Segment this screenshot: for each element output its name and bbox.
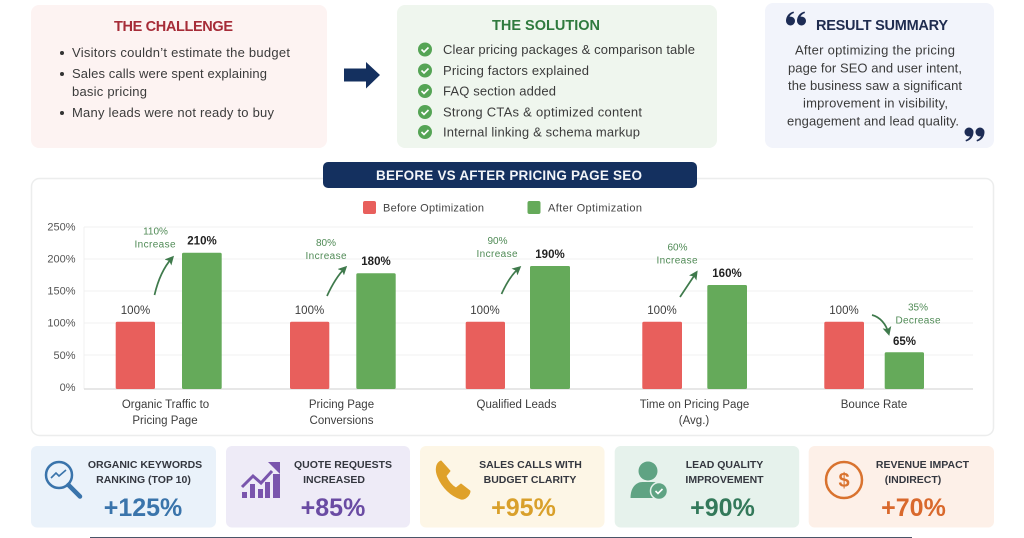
- card: organic keywords: [31, 446, 216, 528]
- group: pricing page conversions: [290, 238, 396, 427]
- panel: the challenge: [31, 5, 327, 148]
- y axis labels: [47, 222, 76, 394]
- group: time on pricing page: 100%: [647, 305, 677, 317]
- group: qualified leads: [466, 236, 570, 411]
- challenge bullet list: basic pricing: [72, 84, 147, 99]
- group: organic traffic: Pricing Page: [132, 415, 198, 427]
- icon: dollar coin: $: [838, 470, 850, 492]
- card: lead quality: [615, 446, 799, 528]
- panel: the solution: [397, 5, 717, 148]
- card: lead quality: LEAD QUALITY: [686, 459, 763, 471]
- group: qualified leads: 190%: [535, 249, 565, 261]
- card: lead quality: IMPROVEMENT: [685, 474, 764, 486]
- group: qualified leads: 90%: [487, 236, 508, 247]
- chart heading banner: BEFORE VS AFTER PRICING PAGE SEO: [376, 168, 642, 183]
- card: organic keywords: +125%: [104, 494, 182, 522]
- card: sales calls: SALES CALLS WITH: [479, 459, 582, 471]
- group: time on pricing page: [640, 242, 749, 427]
- bar chart: [47, 222, 973, 427]
- result summary text: improvement in visibility,: [803, 96, 948, 110]
- y axis labels: 250%: [47, 222, 76, 234]
- card: quote requests: QUOTE REQUESTS: [294, 459, 392, 471]
- solution check list: [418, 42, 695, 140]
- group: bounce rate: Bounce Rate: [841, 399, 907, 411]
- challenge bullet list: Sales calls were spent explaining: [72, 66, 267, 81]
- chart heading banner: [323, 162, 697, 188]
- arrow: challenge to solution: [344, 62, 380, 88]
- challenge bullet list: Visitors couldn’t estimate the budget: [72, 45, 290, 60]
- group: qualified leads: Qualified Leads: [477, 399, 557, 411]
- group: bounce rate: Decrease: [896, 316, 941, 326]
- result summary text: After optimizing the pricing: [795, 42, 955, 58]
- challenge bullet list: [60, 45, 290, 120]
- icon: verified person: [630, 462, 668, 500]
- card: quote requests: +85%: [301, 494, 365, 522]
- result summary text: the business saw a significant: [788, 78, 962, 93]
- group: organic traffic: Organic Traffic to: [122, 399, 209, 411]
- group: time on pricing page: 60%: [667, 242, 688, 254]
- icon: rising bar chart: [242, 462, 280, 498]
- group: organic traffic: Increase: [134, 240, 176, 250]
- result summary text: [787, 42, 962, 128]
- card: lead quality: +90%: [690, 494, 755, 522]
- y axis labels: 100%: [47, 318, 76, 330]
- group: pricing page conversions: Conversions: [310, 415, 374, 427]
- solution check list: FAQ section added: [443, 84, 556, 98]
- group: organic traffic: 210%: [187, 236, 217, 248]
- icon: phone: [436, 461, 470, 499]
- card: organic keywords: RANKING (TOP 10): [96, 474, 191, 486]
- group: pricing page conversions: 180%: [361, 256, 391, 268]
- card: organic keywords: ORGANIC KEYWORDS: [88, 459, 202, 471]
- group: pricing page conversions: 100%: [295, 305, 324, 317]
- group: qualified leads: 100%: [470, 305, 500, 317]
- group: bounce rate: [824, 302, 941, 411]
- solution check list: Strong CTAs & optimized content: [443, 104, 642, 120]
- y axis labels: 200%: [47, 254, 76, 266]
- heading: result summary: RESULT SUMMARY: [816, 18, 948, 34]
- group: qualified leads: Increase: [476, 249, 518, 260]
- group: time on pricing page: 160%: [712, 268, 742, 280]
- chart legend: Before Optimization: [383, 202, 484, 214]
- challenge bullet list: Many leads were not ready to buy: [72, 105, 274, 120]
- group: organic traffic: 100%: [121, 305, 150, 317]
- group: pricing page conversions: Pricing Page: [309, 399, 374, 411]
- group: pricing page conversions: Increase: [306, 251, 347, 262]
- solution check list: Pricing factors explained: [443, 63, 589, 78]
- y axis labels: 0%: [60, 382, 76, 394]
- icon: opening quote: [786, 12, 806, 26]
- group: time on pricing page: Increase: [656, 256, 698, 266]
- solution check list: Internal linking & schema markup: [443, 124, 640, 140]
- group: pricing page conversions: 80%: [316, 238, 336, 249]
- card: revenue impact: +70%: [881, 494, 946, 522]
- group: bounce rate: 100%: [829, 305, 859, 317]
- card: sales calls: +95%: [491, 494, 556, 522]
- card: quote requests: [226, 446, 410, 528]
- heading: the challenge: THE CHALLENGE: [114, 19, 233, 35]
- chart legend: After Optimization: [548, 202, 642, 214]
- y axis labels: 50%: [53, 350, 76, 362]
- bottom banner edge: [90, 537, 912, 538]
- group: bounce rate: 35%: [908, 302, 928, 314]
- card: revenue impact: REVENUE IMPACT: [876, 459, 970, 471]
- group: time on pricing page: Time on Pricing Page: [640, 399, 749, 411]
- group: bounce rate: 65%: [893, 336, 916, 348]
- solution check list: Clear pricing packages & comparison table: [443, 42, 695, 57]
- icon: closing quote: [964, 128, 984, 142]
- group: organic traffic: [116, 226, 222, 427]
- card: sales calls: BUDGET CLARITY: [484, 474, 576, 486]
- card: sales calls: [420, 446, 604, 528]
- icon: magnifier: [46, 462, 80, 496]
- panel: chart card: [32, 162, 994, 436]
- group: time on pricing page: (Avg.): [679, 415, 709, 427]
- chart legend: [363, 201, 642, 214]
- heading: the solution: THE SOLUTION: [492, 18, 600, 34]
- y axis labels: 150%: [47, 286, 76, 298]
- result summary text: page for SEO and user intent,: [788, 60, 962, 76]
- icon: dollar coin: [826, 462, 862, 498]
- card: quote requests: INCREASED: [303, 474, 365, 486]
- result summary text: engagement and lead quality.: [787, 114, 959, 128]
- card: revenue impact: (INDIRECT): [885, 474, 941, 486]
- panel: result summary: [765, 3, 994, 148]
- card: revenue impact: [809, 446, 994, 528]
- group: organic traffic: 110%: [143, 226, 168, 238]
